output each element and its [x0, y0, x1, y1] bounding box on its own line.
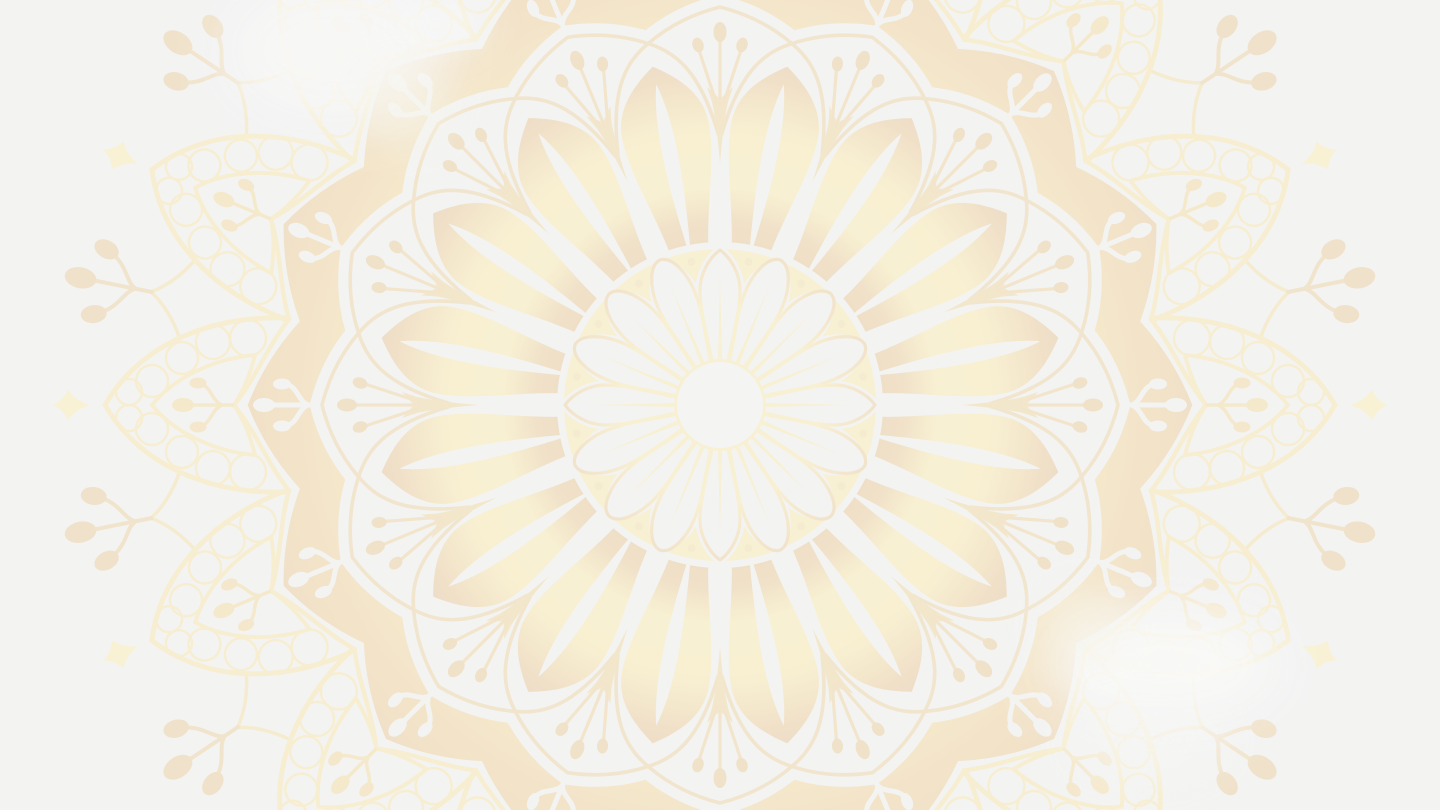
center circle [677, 362, 763, 448]
large gold petals [373, 58, 1067, 752]
lobe outlines [313, 0, 1127, 810]
light wash: top left [230, 0, 485, 145]
tan star band [248, 0, 1192, 810]
inner flower petals [565, 250, 875, 560]
white branches in star tips [253, 0, 1187, 810]
lobe halos [313, 0, 1127, 810]
light wash: bottom right [1045, 589, 1280, 780]
stamens [337, 22, 1103, 788]
central disc [557, 242, 883, 568]
